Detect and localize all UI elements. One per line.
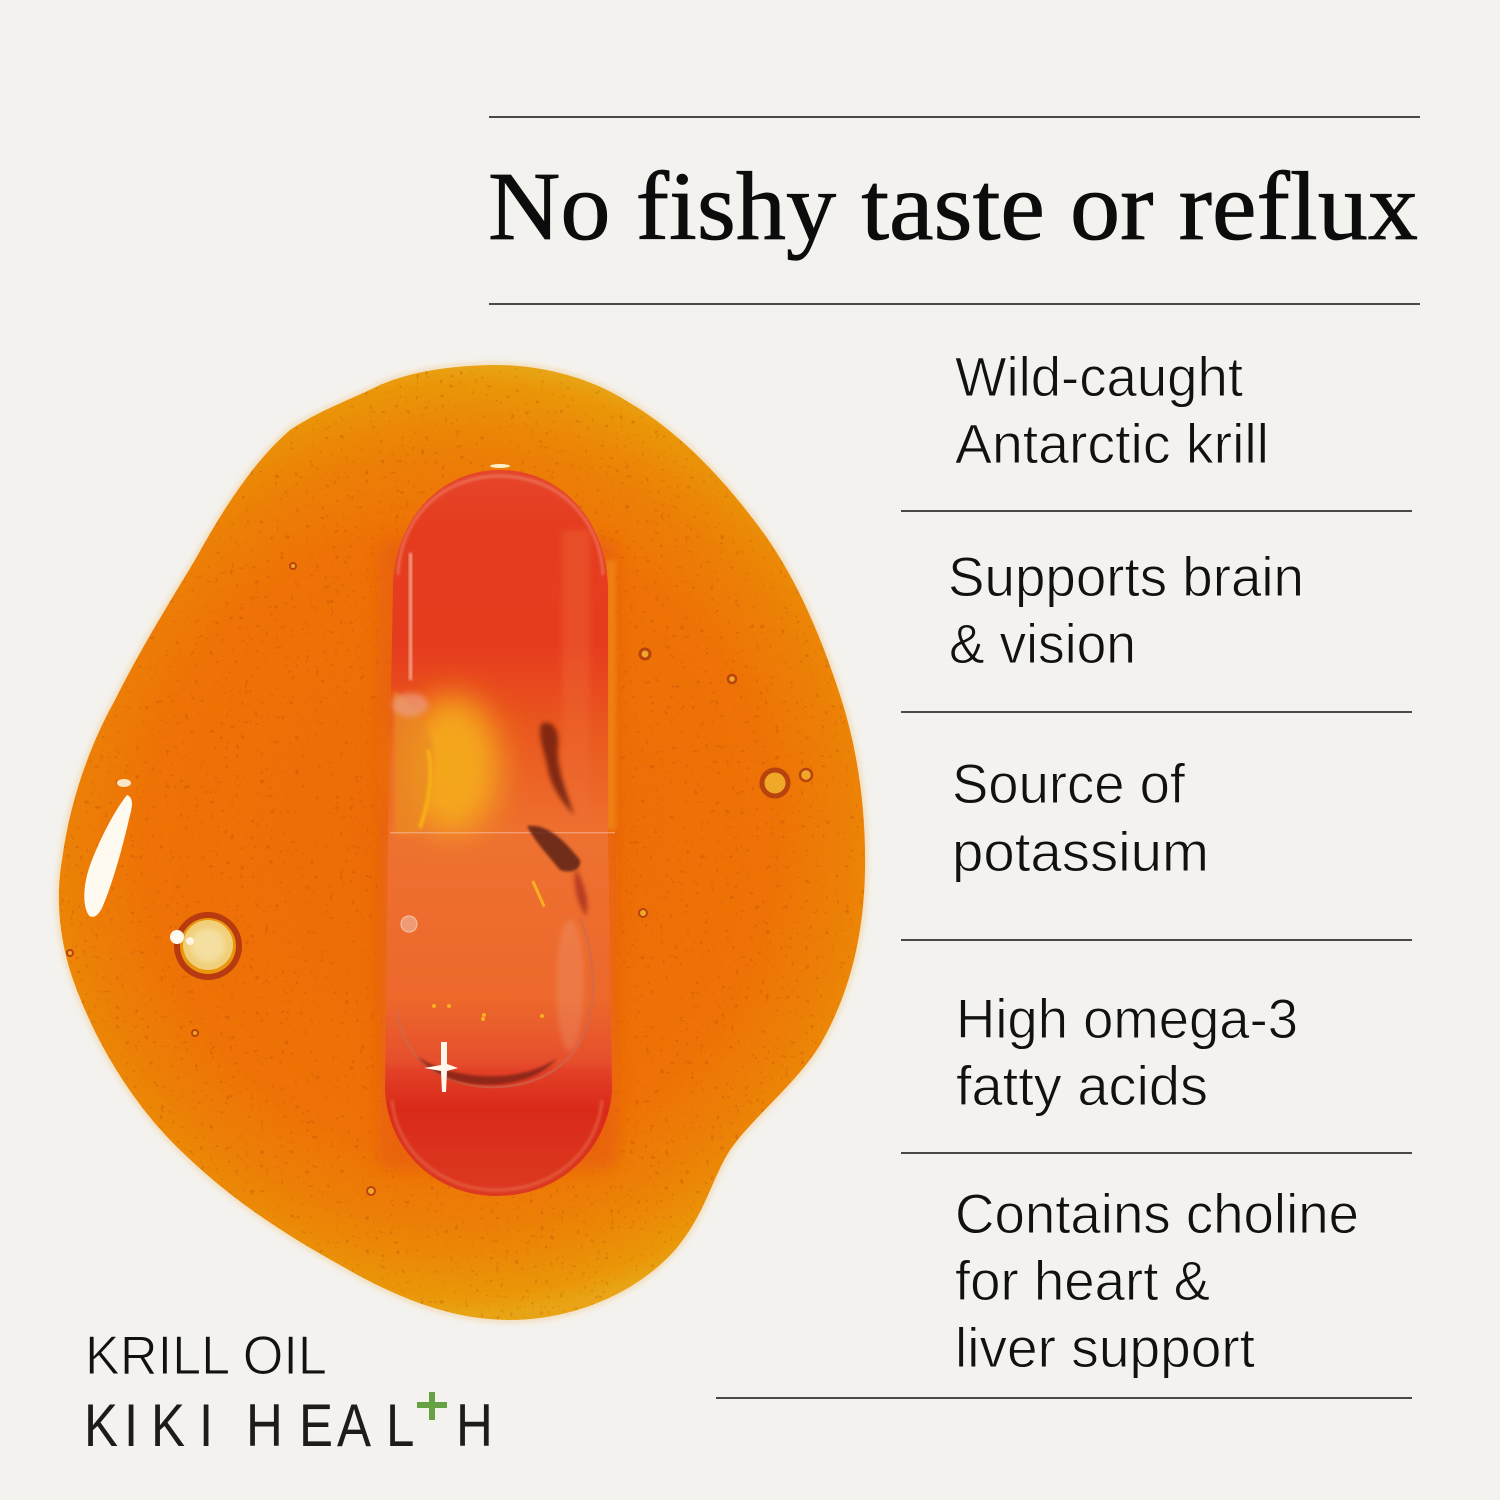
oil speckles <box>50 360 870 1325</box>
capsule <box>378 464 618 1196</box>
capsule outer band <box>378 540 618 1170</box>
pale shell patch <box>392 693 428 717</box>
benefit: potassium: potassium <box>952 820 1209 883</box>
capsule body <box>385 470 612 1196</box>
brand logo: KIKIHEAL <box>84 1392 414 1459</box>
dark inclusion <box>527 722 587 916</box>
capsule sparkle <box>424 1042 458 1092</box>
benefit: choline: for heart & <box>955 1249 1210 1312</box>
glare streak <box>84 779 132 917</box>
benefit: omega-3: High omega-3 <box>956 987 1298 1050</box>
lower band <box>384 836 612 1066</box>
benefit: omega-3 <box>956 987 1298 1117</box>
large bubble <box>170 912 242 980</box>
brand logo: H <box>456 1392 493 1459</box>
left highlight <box>409 553 412 680</box>
bottom crescent <box>417 1056 557 1085</box>
small air bubble <box>401 916 417 932</box>
benefit: brain and vision: Supports brain <box>948 545 1304 608</box>
benefits list <box>716 345 1412 1398</box>
seam <box>390 832 615 833</box>
benefit: omega-3: fatty acids <box>956 1054 1208 1117</box>
benefit: choline <box>955 1182 1359 1379</box>
benefit: potassium: Source of <box>952 752 1185 815</box>
product name: KRILL OIL <box>85 1324 327 1386</box>
benefit: choline: Contains choline <box>955 1182 1359 1245</box>
benefit: wild-caught: Antarctic krill <box>955 412 1269 475</box>
pale right lens <box>556 919 584 1051</box>
title: No fishy taste or reflux <box>488 153 1418 261</box>
left folds <box>393 690 434 835</box>
benefit: wild-caught <box>955 345 1269 475</box>
benefit: brain and vision <box>948 545 1304 675</box>
capsule top rim <box>398 476 603 575</box>
small bubbles <box>67 563 812 1195</box>
right soft band <box>562 530 590 820</box>
oil rim halo <box>59 365 865 1320</box>
right orange edge <box>606 560 616 830</box>
top glint <box>490 464 510 468</box>
benefit: choline: liver support <box>955 1316 1255 1379</box>
oil pool <box>59 365 865 1320</box>
yellow glow <box>404 695 500 835</box>
benefit: wild-caught: Wild-caught <box>955 345 1243 408</box>
benefit: potassium <box>952 752 1209 883</box>
oil blob with capsule <box>50 360 870 1325</box>
gold flecks <box>432 880 546 1021</box>
inner ring <box>397 918 593 1087</box>
logo plus <box>417 1392 447 1420</box>
benefit: brain and vision: & vision <box>949 612 1136 675</box>
capsule bottom rim <box>392 1100 602 1190</box>
